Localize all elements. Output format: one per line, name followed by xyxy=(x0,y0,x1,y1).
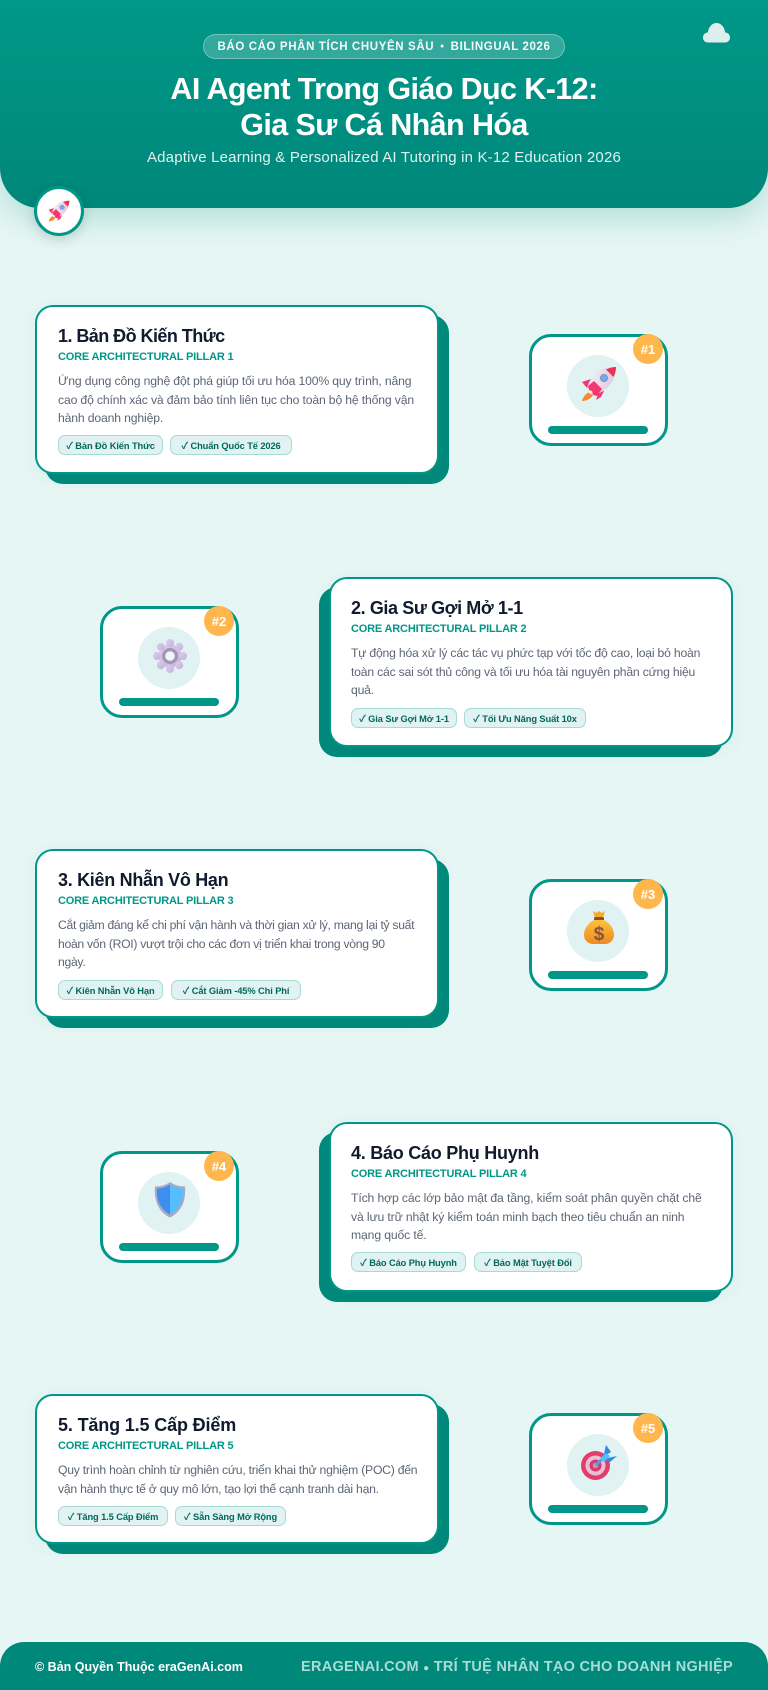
icon: rocket xyxy=(582,367,616,401)
description: hoàn vốn (ROI) vượt trội cho các đơn vị triển khai trong vòng 90 xyxy=(58,937,385,951)
title: Gia Sư Cá Nhân Hóa xyxy=(240,108,528,142)
card offset shadow 5 xyxy=(45,1404,449,1554)
rank badge: #3 xyxy=(641,886,655,902)
subheading: CORE ARCHITECTURAL PILLAR 2 xyxy=(351,623,526,635)
subheading: CORE ARCHITECTURAL PILLAR 3 xyxy=(58,895,233,907)
copyright: © Bản Quyền Thuộc eraGenAi.com xyxy=(35,1660,243,1674)
tag: ✓ Bảo Mật Tuyệt Đối xyxy=(484,1258,572,1268)
heading: 2. Gia Sư Gợi Mở 1-1 xyxy=(351,598,523,618)
footer xyxy=(0,1642,768,1690)
description xyxy=(58,374,414,425)
badge: report label xyxy=(203,34,565,59)
icon card 4 xyxy=(100,1151,239,1263)
description: ngày. xyxy=(58,955,85,969)
description xyxy=(58,918,414,969)
description: hành doanh nghiệp. xyxy=(58,411,163,425)
title: AI Agent Trong Giáo Dục K-12: xyxy=(170,72,598,106)
icon card 1 xyxy=(529,334,668,446)
tag xyxy=(58,1506,168,1526)
icon: money bag xyxy=(584,911,614,945)
description: cao độ chính xác và đảm bảo tính liên tục cho toàn bộ hệ thống vận xyxy=(58,393,414,407)
icon circle xyxy=(567,355,629,417)
subtitle: Adaptive Learning & Personalized AI Tutoring in K-12 Education 2026 xyxy=(147,149,621,166)
badge: report label: BÁO CÁO PHÂN TÍCH CHUYÊN SÂU BILINGUAL 2026 xyxy=(217,40,551,52)
rank badge: #4 xyxy=(212,1158,226,1174)
card 4 xyxy=(329,1122,733,1292)
icon circle xyxy=(138,1172,200,1234)
icon circle xyxy=(138,627,200,689)
heading: 1. Bản Đồ Kiến Thức xyxy=(58,326,225,346)
tag: ✓ Bản Đồ Kiến Thức xyxy=(66,441,155,451)
tag xyxy=(351,708,457,728)
rank badge: #5 xyxy=(641,1420,655,1436)
tag xyxy=(58,980,163,1000)
description xyxy=(58,1463,417,1496)
icon circle xyxy=(567,900,629,962)
header banner xyxy=(0,0,768,208)
progress bar xyxy=(119,698,219,706)
tag: ✓ Báo Cáo Phụ Huynh xyxy=(360,1258,457,1268)
rank badge xyxy=(204,606,234,636)
icon: target with dart xyxy=(581,1445,617,1480)
icon circle xyxy=(567,1434,629,1496)
tag: ✓ Chuẩn Quốc Tế 2026 xyxy=(181,441,281,451)
tag xyxy=(175,1506,286,1526)
tag xyxy=(474,1252,582,1272)
progress bar xyxy=(548,426,648,434)
tag: ✓ Tối Ưu Năng Suất 10x xyxy=(473,714,577,724)
icon card 5 xyxy=(529,1413,668,1525)
tag xyxy=(170,435,292,455)
description: Tích hợp các lớp bảo mật đa tầng, kiểm soát phân quyền chặt chẽ xyxy=(351,1191,702,1205)
tag: ✓ Tăng 1.5 Cấp Điểm xyxy=(68,1512,158,1522)
description: vận hành thực tế ở quy mô lớn, tạo lợi thế cạnh tranh dài hạn. xyxy=(58,1482,379,1496)
card 1 xyxy=(35,305,439,474)
tag xyxy=(464,708,586,728)
panel: pillar 2 xyxy=(100,577,733,757)
description: Quy trình hoàn chỉnh từ nghiên cứu, triển khai thử nghiệm (POC) đến xyxy=(58,1463,417,1477)
progress bar xyxy=(548,971,648,979)
card offset shadow 1 xyxy=(45,315,449,484)
tag: ✓ Kiên Nhẫn Vô Hạn xyxy=(66,986,155,996)
tag xyxy=(58,435,163,455)
progress bar xyxy=(119,1243,219,1251)
subheading: CORE ARCHITECTURAL PILLAR 1 xyxy=(58,351,233,363)
icon card 2 xyxy=(100,606,239,718)
icon: money bag: $ xyxy=(594,924,605,945)
description xyxy=(351,646,700,697)
subheading: CORE ARCHITECTURAL PILLAR 4 xyxy=(351,1168,526,1180)
card 2 xyxy=(329,577,733,747)
card 5 xyxy=(35,1394,439,1544)
description: quả. xyxy=(351,683,374,697)
card offset shadow 3 xyxy=(45,859,449,1028)
heading: 5. Tăng 1.5 Cấp Điểm xyxy=(58,1415,236,1435)
icon: header rocket badge xyxy=(34,186,84,236)
description: và lưu trữ nhật ký kiểm toán minh bạch theo tiêu chuẩn an ninh xyxy=(351,1210,684,1224)
title xyxy=(170,72,598,142)
description: Cắt giảm đáng kể chi phí vận hành và thời gian xử lý, mang lại tỷ suất xyxy=(58,918,414,932)
icon card 3 xyxy=(529,879,668,991)
description: toàn các sai sót thủ công và tối ưu hóa tài nguyên phần cứng hiệu xyxy=(351,665,695,679)
panel: pillar 3 xyxy=(35,849,668,1028)
card 3 xyxy=(35,849,439,1018)
panel: pillar 1 xyxy=(35,305,668,484)
rank badge xyxy=(204,1151,234,1181)
tag: ✓ Cắt Giảm -45% Chi Phí xyxy=(183,986,289,996)
panel: pillar 4 xyxy=(100,1122,733,1302)
rank badge: #1 xyxy=(641,342,655,356)
tag: ✓ Gia Sư Gợi Mở 1-1 xyxy=(359,714,449,724)
badge: report label: ● xyxy=(440,43,445,50)
icon: cloud xyxy=(703,23,730,42)
subheading: CORE ARCHITECTURAL PILLAR 5 xyxy=(58,1440,233,1452)
heading: 3. Kiên Nhẫn Vô Hạn xyxy=(58,870,228,890)
description: mạng quốc tế. xyxy=(351,1228,427,1242)
progress bar xyxy=(548,1505,648,1513)
tag xyxy=(171,980,301,1000)
footer tagline: ERAGENAI.COM ● TRÍ TUỆ NHÂN TẠO CHO DOANH NGHIỆP xyxy=(301,1659,733,1675)
description: Tự động hóa xử lý các tác vụ phức tạp với tốc độ cao, loại bỏ hoàn xyxy=(351,646,700,660)
rank badge xyxy=(633,334,663,364)
description: Ứng dụng công nghệ đột phá giúp tối ưu hóa 100% quy trình, nâng xyxy=(58,374,411,388)
card offset shadow 4 xyxy=(319,1132,723,1302)
tag xyxy=(351,1252,466,1272)
panel: pillar 5 xyxy=(35,1394,668,1554)
icon: shield xyxy=(154,1182,186,1218)
rank badge: #2 xyxy=(212,614,226,628)
icon: gear xyxy=(153,639,187,673)
rank badge xyxy=(633,1413,663,1443)
rank badge xyxy=(633,879,663,909)
card offset shadow 2 xyxy=(319,587,723,757)
heading: 4. Báo Cáo Phụ Huynh xyxy=(351,1143,539,1163)
description xyxy=(351,1191,702,1242)
tag: ✓ Sẵn Sàng Mở Rộng xyxy=(184,1512,277,1522)
